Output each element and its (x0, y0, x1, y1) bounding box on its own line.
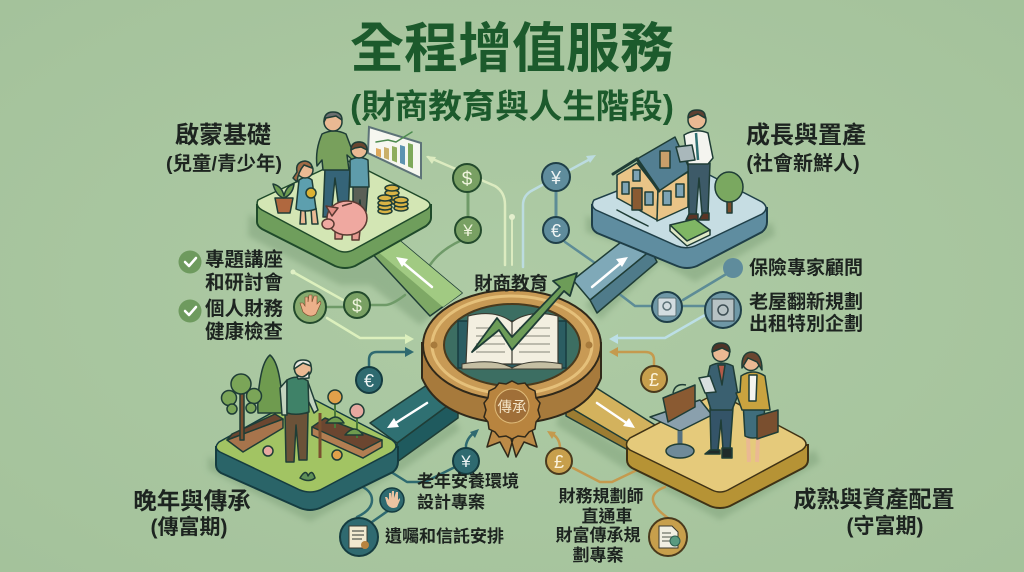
coin: euro left (356, 367, 382, 393)
coin: euro right (543, 217, 569, 243)
figure: woman in jacket (736, 352, 778, 462)
title: 全程增值服務 (350, 19, 674, 79)
coin: dollar left (344, 292, 370, 318)
coin: yen right (542, 163, 570, 191)
label: legacy stage: (傳富期) (150, 515, 228, 539)
planter right with flowers (312, 390, 382, 458)
coin: yen bottom: ¥ (460, 452, 471, 471)
icon: coin stacks (378, 185, 408, 214)
platform shadows (208, 214, 820, 522)
list: planners and legacy plan: 直通車 (582, 506, 632, 526)
list: seminars and check-up (178, 248, 284, 343)
label: childhood stage: 啟蒙基礎 (175, 122, 271, 149)
icon: safe small (652, 292, 682, 322)
label: legacy stage: 晚年與傳承 (133, 488, 251, 514)
label: growth stage (746, 121, 866, 175)
icon: hand care (380, 488, 404, 512)
coin: dollar left: $ (352, 296, 362, 316)
coin: pound right (641, 366, 667, 392)
coin: dollar top: $ (462, 169, 473, 190)
icon: banknotes (670, 219, 710, 246)
connector lines and arrows (290, 155, 728, 522)
icon: piggy bank (322, 201, 367, 240)
medallion base (422, 290, 601, 424)
coin: euro left: € (364, 371, 374, 391)
list: insurance and renovation: 老屋翻新規劃 (749, 290, 863, 313)
list: planners and legacy plan: 財富傳承規 (556, 525, 640, 545)
list: elder care and trust (385, 471, 519, 546)
central medallion: financial education (422, 273, 601, 457)
figure: man in suit (699, 343, 738, 458)
ribbon badge: 傳承 (498, 399, 527, 416)
icon: safe large (705, 292, 741, 328)
list: elder care and trust: 設計專案 (417, 492, 485, 512)
figure: girl (293, 161, 318, 224)
coin: euro right: € (551, 221, 561, 241)
arm: bottom left (370, 383, 458, 462)
figure: elderly man with cane (280, 360, 320, 462)
check icon one (178, 250, 202, 274)
label: childhood stage (166, 122, 282, 175)
table with briefcase (650, 385, 712, 458)
subtitle: (財商教育與人生階段) (350, 89, 674, 126)
coin: pound bottom: £ (554, 452, 564, 472)
figure: businessman (676, 110, 713, 220)
label: maturity stage: 成熟與資產配置 (794, 486, 954, 512)
figure: boy (350, 142, 369, 212)
arm: bottom right (566, 382, 655, 450)
icon: rising arrow (472, 273, 577, 352)
icon: will document (340, 518, 378, 556)
platform: growth (592, 110, 767, 268)
arm: top left (366, 235, 462, 316)
ground flowers (263, 446, 342, 480)
label: maturity stage (794, 486, 954, 538)
coin: pound right: £ (649, 370, 659, 390)
label: growth stage: (社會新鮮人) (746, 151, 860, 175)
list: seminars and check-up: 健康檢查 (205, 320, 283, 343)
label: childhood stage: (兒童/青少年) (166, 152, 282, 175)
icon: dot marker (723, 258, 743, 278)
coin: dollar top (453, 164, 481, 192)
icon: house (613, 137, 690, 226)
arm: top right (573, 235, 657, 313)
check icon two (178, 300, 202, 322)
planter left with trees (222, 355, 283, 452)
icon: hand check-up (294, 291, 326, 323)
list: planners and legacy plan: 財務規劃師 (558, 487, 644, 506)
icon: wealth document (649, 518, 687, 556)
list: planners and legacy plan (556, 487, 644, 565)
central label: 財商教育 (474, 273, 548, 294)
list: seminars and check-up: 和研討會 (205, 271, 284, 294)
platform: childhood (257, 112, 431, 268)
list: insurance and renovation: 保險專家顧問 (749, 256, 863, 279)
figure: father (317, 112, 362, 217)
chart board (368, 127, 421, 178)
icon: tree (715, 172, 743, 213)
icon: open book (458, 314, 566, 369)
label: growth stage: 成長與置產 (746, 121, 866, 149)
coin: yen bottom (453, 448, 479, 474)
coin: pound bottom (546, 448, 572, 474)
list: planners and legacy plan: 劃專案 (572, 546, 624, 565)
label: legacy stage (133, 488, 251, 539)
list: elder care and trust: 老年安養環境 (417, 471, 519, 491)
platform: maturity (626, 343, 808, 508)
list: seminars and check-up: 專題講座 (205, 248, 283, 271)
list: elder care and trust: 遺囑和信託安排 (385, 526, 504, 546)
coin: yen left: ¥ (462, 221, 473, 240)
list: insurance and renovation (749, 256, 863, 335)
ribbon badge (484, 381, 540, 457)
list: seminars and check-up: 個人財務 (205, 298, 284, 320)
list: insurance and renovation: 出租特別企劃 (749, 312, 863, 335)
label: maturity stage: (守富期) (846, 514, 924, 538)
coin: yen left (455, 217, 481, 243)
coin: yen right: ¥ (550, 168, 562, 188)
icon: potted plant (273, 184, 294, 213)
platform: legacy (216, 355, 398, 510)
